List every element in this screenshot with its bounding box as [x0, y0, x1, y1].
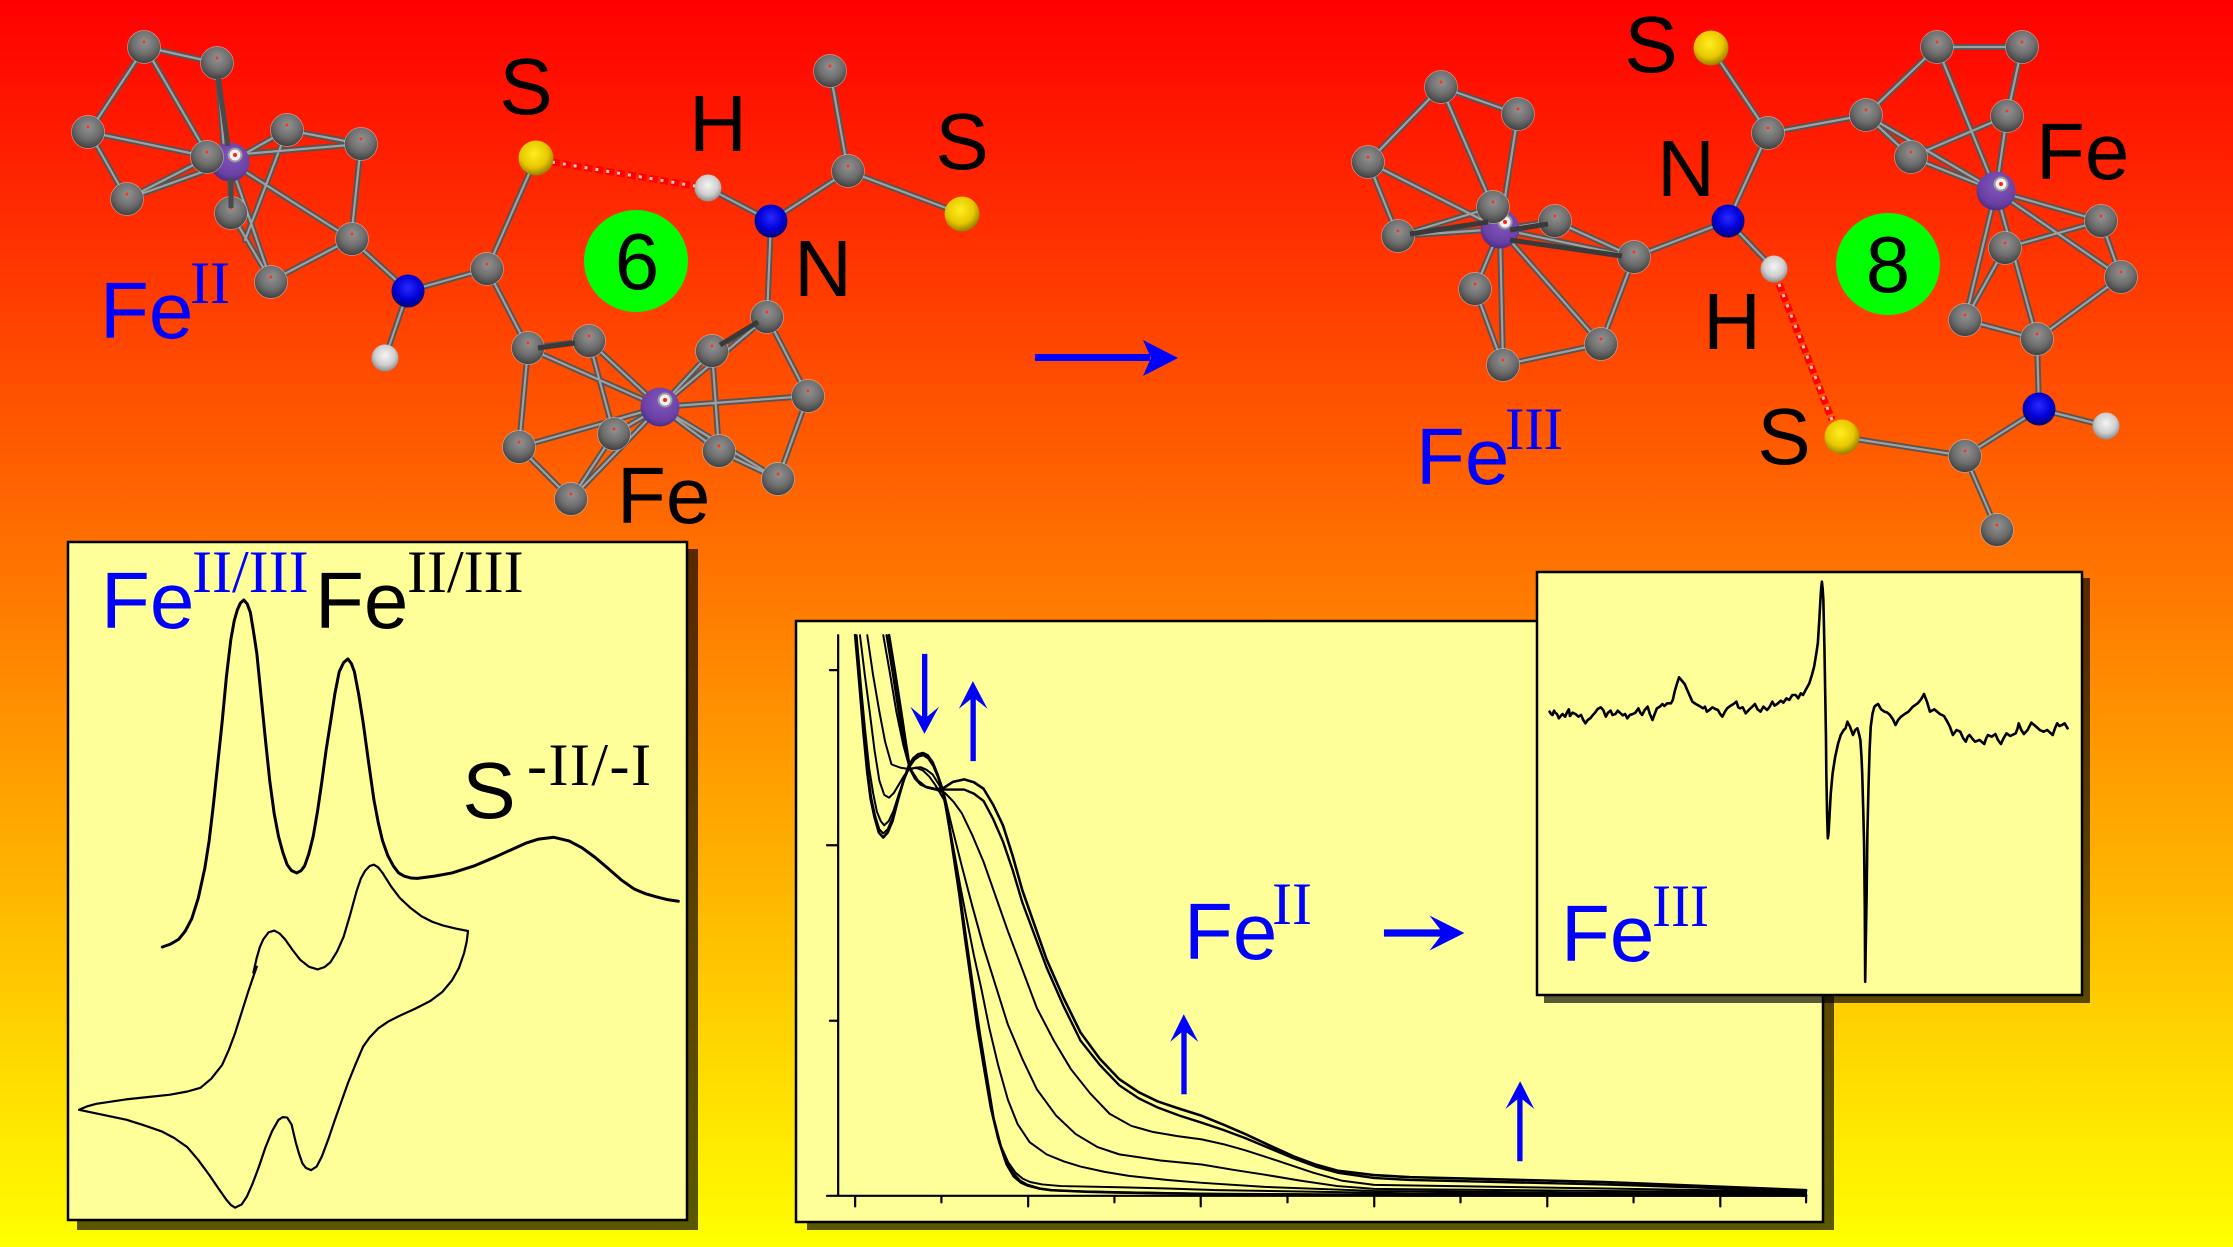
atom labels of left molecule: S	[499, 42, 553, 131]
molecule: ring size 6 FeII complex	[72, 30, 989, 540]
label: FeII: Fe	[1184, 887, 1277, 976]
panel: EPR spectrum	[1537, 572, 2090, 1003]
chart: EPR trace	[1550, 582, 2068, 982]
label: second Fe couple: II/III	[407, 539, 524, 605]
FeIII label: III	[1505, 396, 1563, 462]
atoms of left molecule	[72, 30, 980, 516]
chart: differential pulse curve	[162, 600, 678, 947]
hydrogen bond H to S	[1779, 284, 1832, 420]
bonds of right molecule	[1368, 47, 2121, 530]
arrow: up at visible band	[1170, 1014, 1198, 1094]
FeII label: Fe	[100, 266, 193, 355]
ring size badge 6: 6	[615, 217, 659, 306]
label: sulfur couple: S	[462, 746, 516, 835]
label: FeIII	[1561, 873, 1709, 978]
FeIII label	[1416, 396, 1563, 501]
label: FeIII: Fe	[1561, 889, 1654, 978]
atom labels of left molecule: Fe	[617, 451, 710, 540]
label: sulfur couple: -II/-I	[527, 732, 651, 798]
label: first Fe couple: II/III	[192, 539, 309, 605]
label: second Fe couple: Fe	[315, 556, 408, 645]
label: FeIII: III	[1652, 873, 1709, 939]
atom labels of right molecule: S	[1757, 392, 1811, 481]
molecule: ring size 8 FeIII complex	[1352, 0, 2138, 546]
panel: voltammetry	[68, 539, 698, 1230]
chart: absorption spectra in FeII to FeIII titration	[827, 635, 1806, 1206]
atom labels of right molecule	[1624, 0, 2129, 481]
FeII label	[100, 250, 230, 355]
label: sulfur couple	[462, 732, 651, 835]
axes with ticks	[827, 635, 1806, 1206]
arrow: up near shoulder	[959, 681, 987, 761]
panel: absorption spectra	[796, 621, 1834, 1230]
atom labels of left molecule	[499, 42, 989, 540]
atom labels of right molecule: Fe	[2036, 107, 2129, 196]
ring size badge 8	[1836, 213, 1940, 315]
FeIII label: Fe	[1416, 412, 1509, 501]
label: second Fe couple	[315, 539, 524, 645]
label: first Fe couple	[101, 539, 309, 645]
FeII label: II	[190, 250, 230, 316]
label: first Fe couple: Fe	[101, 556, 194, 645]
atom labels of left molecule: S	[935, 97, 989, 186]
atom labels of left molecule: N	[794, 224, 852, 313]
ring size badge 6	[584, 210, 688, 312]
arrow: up at near-infrared band	[1506, 1081, 1534, 1161]
arrow: down near first peak	[910, 654, 939, 734]
spectral traces	[855, 635, 1806, 1195]
atom labels of left molecule: H	[689, 79, 747, 168]
atom labels of right molecule: S	[1624, 0, 1678, 89]
atom labels of right molecule: H	[1703, 277, 1761, 366]
atoms of right molecule	[1352, 30, 2138, 546]
label: FeII	[1184, 871, 1312, 976]
ring size badge 8: 8	[1866, 220, 1910, 309]
arrow: reaction	[1035, 340, 1178, 376]
bonds of left molecule	[89, 47, 962, 499]
atom labels of right molecule: N	[1657, 124, 1715, 213]
label: FeII: II	[1272, 871, 1312, 937]
hydrogen bond S to H	[552, 162, 695, 186]
chart: cyclic voltammogram	[79, 865, 468, 1208]
arrow: FeII to FeIII	[1384, 916, 1464, 950]
